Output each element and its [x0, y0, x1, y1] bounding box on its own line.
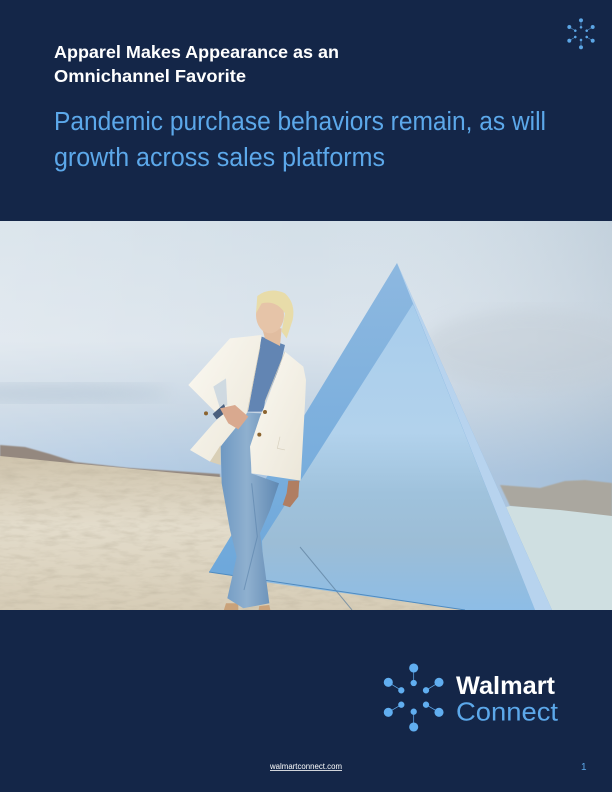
hand at side — [283, 481, 299, 507]
logo: Walmart Connect — [384, 664, 559, 731]
wordmark: Walmart: Walmart — [456, 672, 556, 700]
neck and face — [262, 327, 282, 346]
denim shirt — [246, 337, 285, 412]
model figure — [188, 291, 306, 612]
title: Omnichannel Favorite — [54, 66, 246, 86]
hair — [256, 291, 293, 338]
footer link: walmartconnect.com — [269, 762, 342, 771]
sand ground — [0, 456, 480, 612]
subtitle: growth across sales platforms — [54, 144, 385, 172]
title: Apparel Makes Appearance as an — [54, 42, 339, 62]
blazer — [188, 335, 262, 462]
icon: small network mark — [568, 18, 594, 49]
gap under arm — [213, 378, 227, 408]
jeans — [221, 413, 279, 608]
buttons — [263, 410, 267, 414]
page number: 1 — [581, 762, 587, 773]
cuff and hand at hip — [213, 404, 227, 419]
subtitle: Pandemic purchase behaviors remain, as will — [54, 108, 546, 136]
feet — [224, 603, 270, 610]
photo: model beside a glass triangle in the desert — [0, 221, 612, 612]
distant hills — [0, 445, 612, 518]
sky — [0, 221, 612, 521]
glass triangle — [209, 263, 552, 610]
wordmark: Connect: Connect — [456, 696, 559, 726]
icon: network mark — [384, 664, 443, 731]
salt flat — [506, 506, 612, 610]
